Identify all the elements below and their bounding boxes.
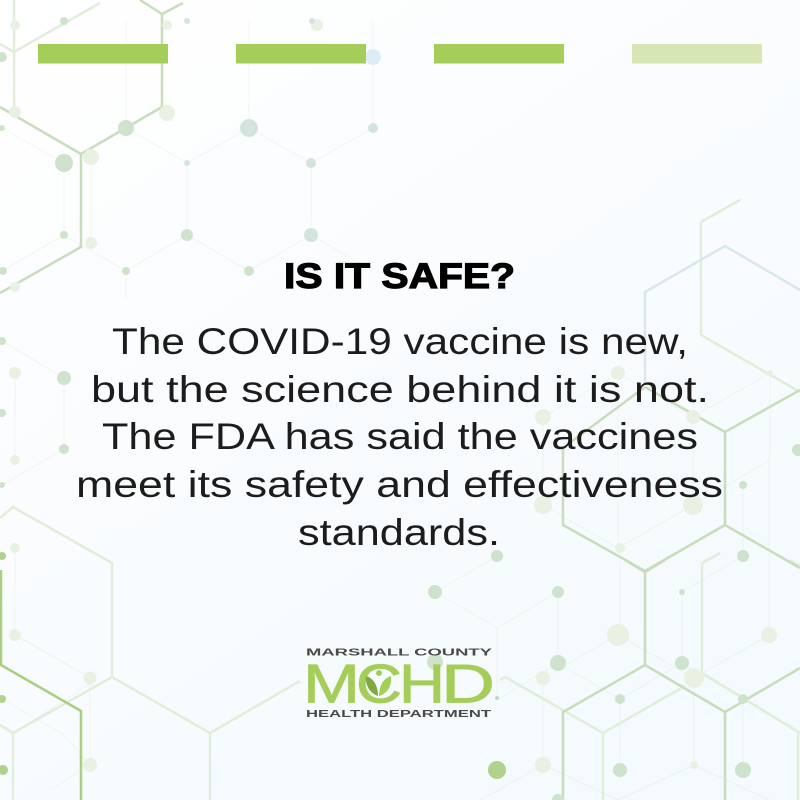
body text: The FDA has said the vaccines: [102, 416, 698, 457]
hexagon outline: pale blue: [645, 246, 800, 385]
progress bars: [38, 44, 762, 64]
logo letters: C: [356, 652, 402, 714]
body text: meet its safety and effectiveness: [76, 464, 723, 505]
body text: The COVID-19 vaccine is new,: [112, 321, 688, 362]
logo bottom line: HEALTH DEPARTMENT: [306, 708, 492, 720]
logo letters: M: [303, 652, 360, 714]
strong green nodes: [0, 552, 506, 779]
logo top line: MARSHALL COUNTY: [306, 646, 492, 658]
body text: but the science behind it is not.: [91, 369, 709, 410]
logo letters: [303, 652, 495, 714]
logo: MCHD: [303, 646, 499, 720]
heading: IS IT SAFE?: [284, 257, 515, 296]
body text: [76, 321, 723, 553]
logo letters: D: [441, 652, 495, 714]
logo letters: H: [399, 652, 445, 714]
body text: standards.: [298, 512, 500, 553]
blue node: [365, 49, 381, 65]
hexagon outline: strong green: [1, 570, 81, 800]
blue-green nodes: [184, 18, 378, 242]
logo registered dot: [495, 696, 499, 700]
icon: leaf and figure: [366, 670, 391, 696]
